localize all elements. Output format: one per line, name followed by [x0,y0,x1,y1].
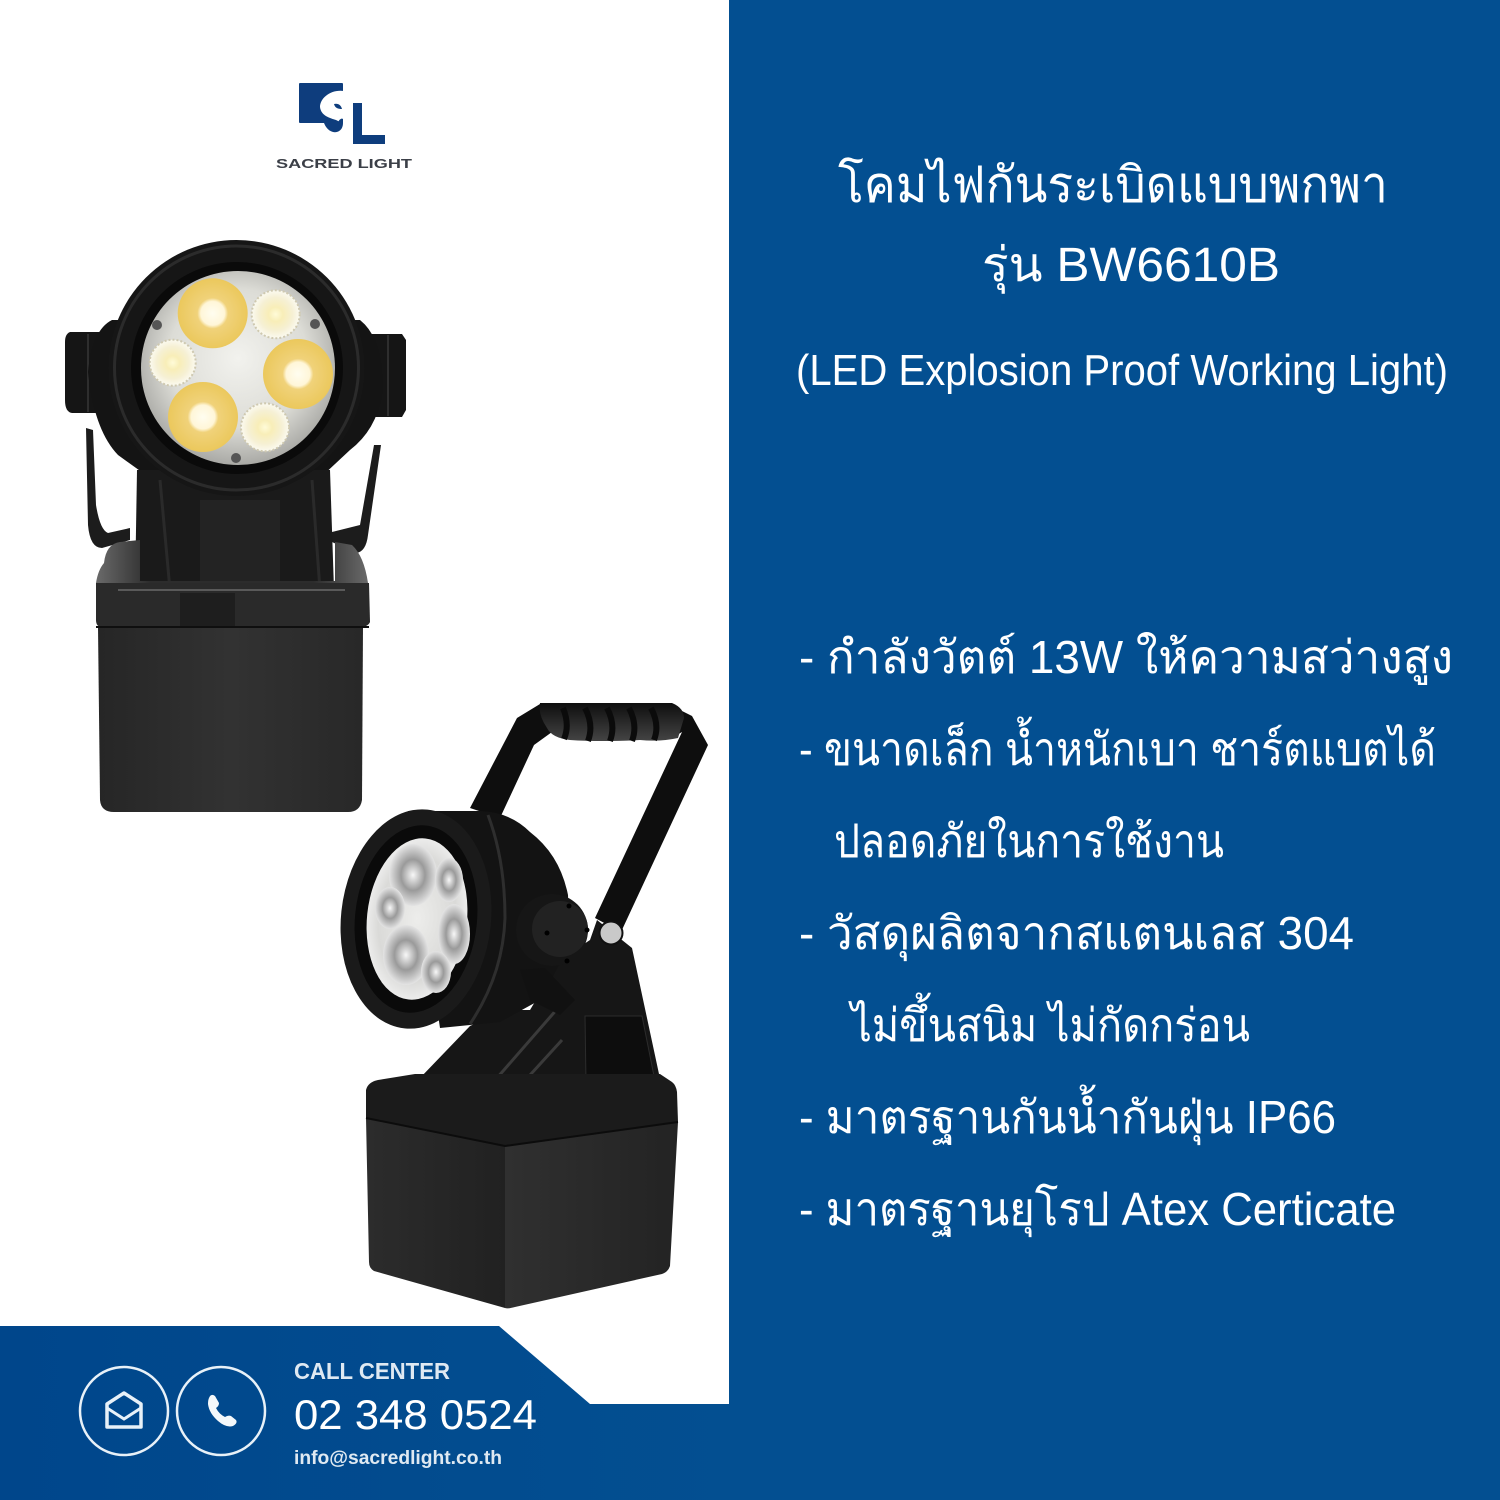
lamp body [408,811,570,1028]
feature list: - มาตรฐานยุโรป Atex Certicate [799,1183,1396,1238]
call center text: 02 348 0524 [294,1391,537,1438]
title: โคมไฟกันระเบิดแบบพกพา [838,157,1388,213]
battery box [366,1074,678,1308]
carrying handle [470,703,708,932]
LEDs [375,844,470,993]
feature list: ปลอดภัยในการใช้งาน [834,815,1224,867]
chrome screw [600,922,622,944]
feature list: - กำลังวัตต์ 13W ให้ความสว่างสูง [799,631,1453,685]
feature list: - ขนาดเล็ก น้ำหนักเบา ชาร์ตแบตได้ [799,716,1436,775]
feature list: - วัสดุผลิตจากสแตนเลส 304 [799,907,1354,962]
rear housing [88,320,382,478]
lamp head ring [108,240,364,496]
feature list: ไม่ขึ้นสนิม ไม่กัดกร่อน [847,992,1250,1051]
call center text: CALL CENTER [294,1358,450,1384]
feature list [799,631,1453,1238]
side knobs [65,332,406,417]
icon: phone [177,1367,265,1455]
call center text: info@sacredlight.co.th [294,1448,502,1469]
title: รุ่น BW6610B [982,239,1280,294]
pivot knob [516,894,590,1015]
footer contact band [0,1326,729,1500]
panel: blue specification background [729,0,1500,1500]
LEDs [150,278,333,463]
panel: white product background [0,0,729,1404]
stand [415,920,662,1088]
product photo: front view work light [65,240,406,812]
product photo: angled view work light [330,703,708,1308]
logo: Sacred Light [276,83,412,171]
subtitle: (LED Explosion Proof Working Light) [796,346,1448,395]
lamp face ring [330,802,502,1036]
call center text [294,1358,537,1469]
lens [141,271,335,465]
logo: Sacred Light: SACRED LIGHT [276,156,412,171]
stand [135,470,334,590]
lens [359,833,475,1005]
battery box [96,540,370,812]
icon: mail [80,1367,168,1455]
feature list: - มาตรฐานกันน้ำกันฝุ่น IP66 [799,1084,1336,1146]
title [838,157,1388,294]
wire brackets [86,428,130,548]
